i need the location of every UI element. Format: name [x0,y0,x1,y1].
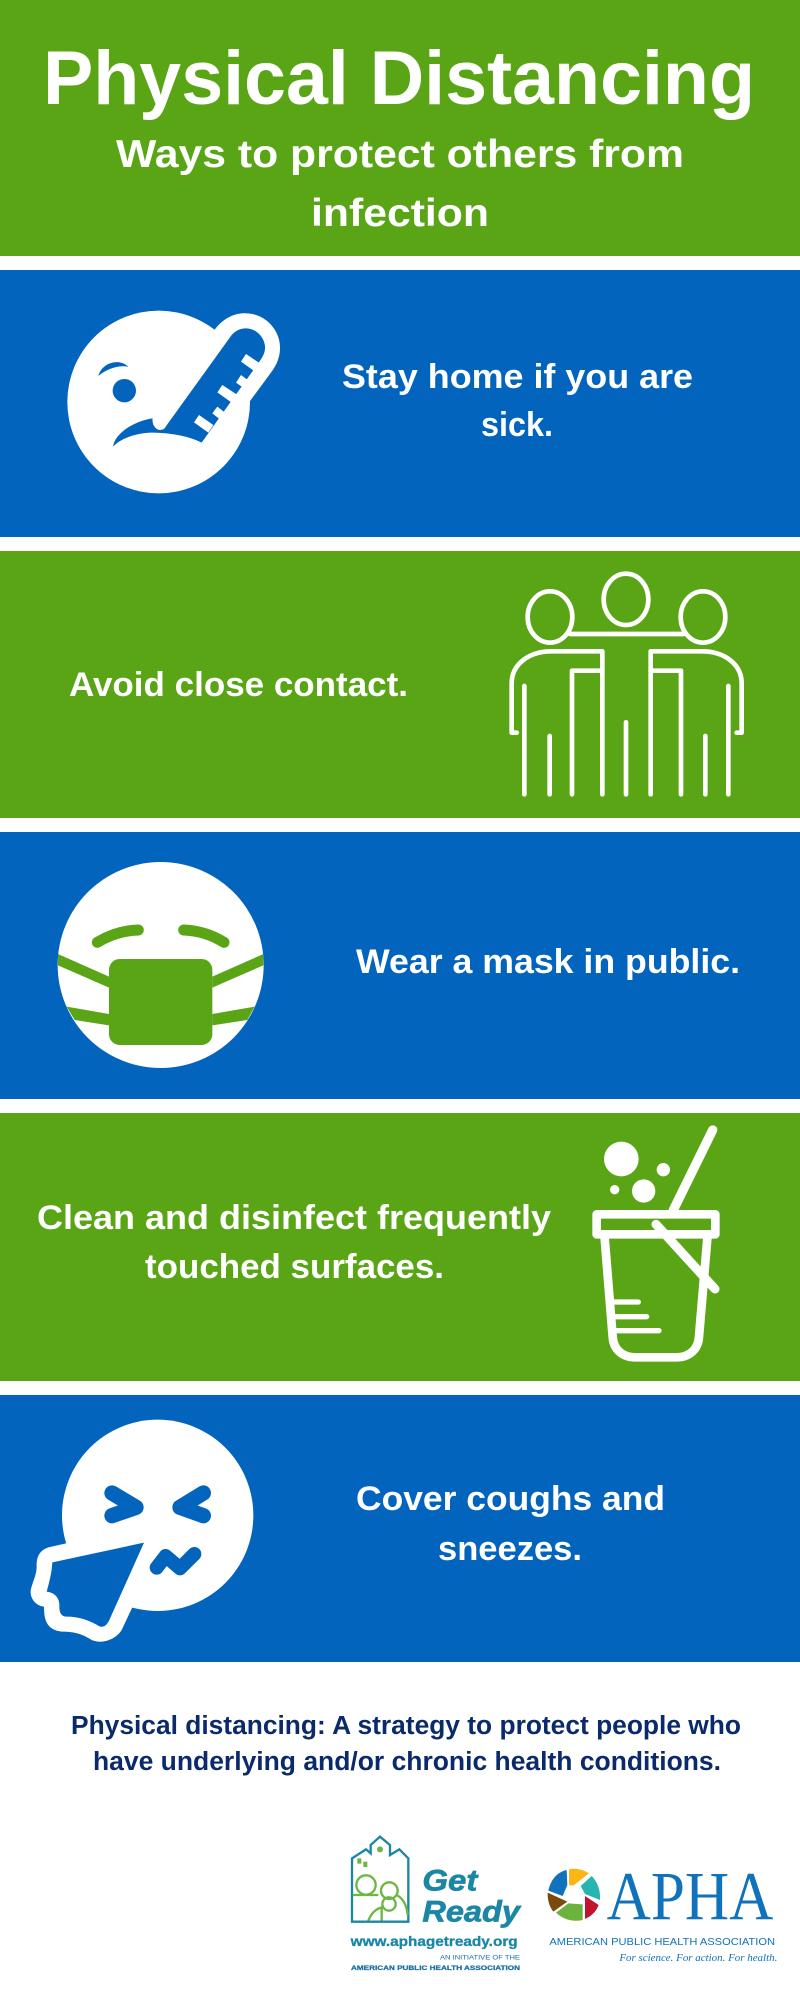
panel: stay home [0,270,800,537]
text: cover coughs [356,1480,665,1568]
text: stay home: Stay home if you are [342,358,693,396]
icon: face with mask [58,862,264,1068]
panel: clean and disinfect [0,1113,800,1381]
icon: sick face with thermometer [67,311,280,493]
text: clean and disinfect: Clean and disinfect frequently [37,1199,551,1237]
logo: APHA: For science. For action. For health. [618,1953,777,1964]
panel: cover coughs [0,1395,800,1662]
logo: APHA: AMERICAN PUBLIC HEALTH ASSOCIATION [549,1937,775,1948]
text: stay home [342,358,693,444]
footer statement: have underlying and/or chronic health conditions. [93,1748,721,1776]
footer statement: Physical distancing: A strategy to protect people who [71,1712,741,1740]
text: avoid close contact: Avoid close contact. [69,666,408,704]
logo: Get Ready: AN INITIATIVE OF THE [440,1954,521,1961]
text: clean and disinfect [37,1199,551,1286]
logo: APHA [548,1857,777,1964]
panel: wear a mask [0,832,800,1099]
logo: Get Ready [350,1837,522,1972]
text: cover coughs: Cover coughs and [356,1480,665,1518]
icon: sneezing face with tissue [31,1420,253,1642]
subtitle [116,133,684,235]
logo: Get Ready: www.aphagetready.org [350,1933,518,1949]
panel: avoid close contact [0,551,800,818]
logo: Get Ready: Get [422,1865,479,1898]
footer statement [71,1712,741,1776]
text: wear a mask: Wear a mask in public. [356,943,740,981]
icon: cleaning bucket [597,1130,715,1357]
subtitle: Ways to protect others from [116,133,684,176]
logo: Get Ready: AMERICAN PUBLIC HEALTH ASSOCIATION [351,1965,520,1972]
panel: header [0,0,800,256]
text: clean and disinfect: touched surfaces. [145,1248,444,1286]
logo: Get Ready: Ready [422,1896,522,1929]
title: Physical Distancing [43,36,755,121]
subtitle: infection [311,192,489,235]
logo: APHA: APHA [607,1857,773,1934]
text: stay home: sick. [481,406,553,444]
icon: three people [512,574,742,794]
text: cover coughs: sneezes. [438,1530,582,1568]
